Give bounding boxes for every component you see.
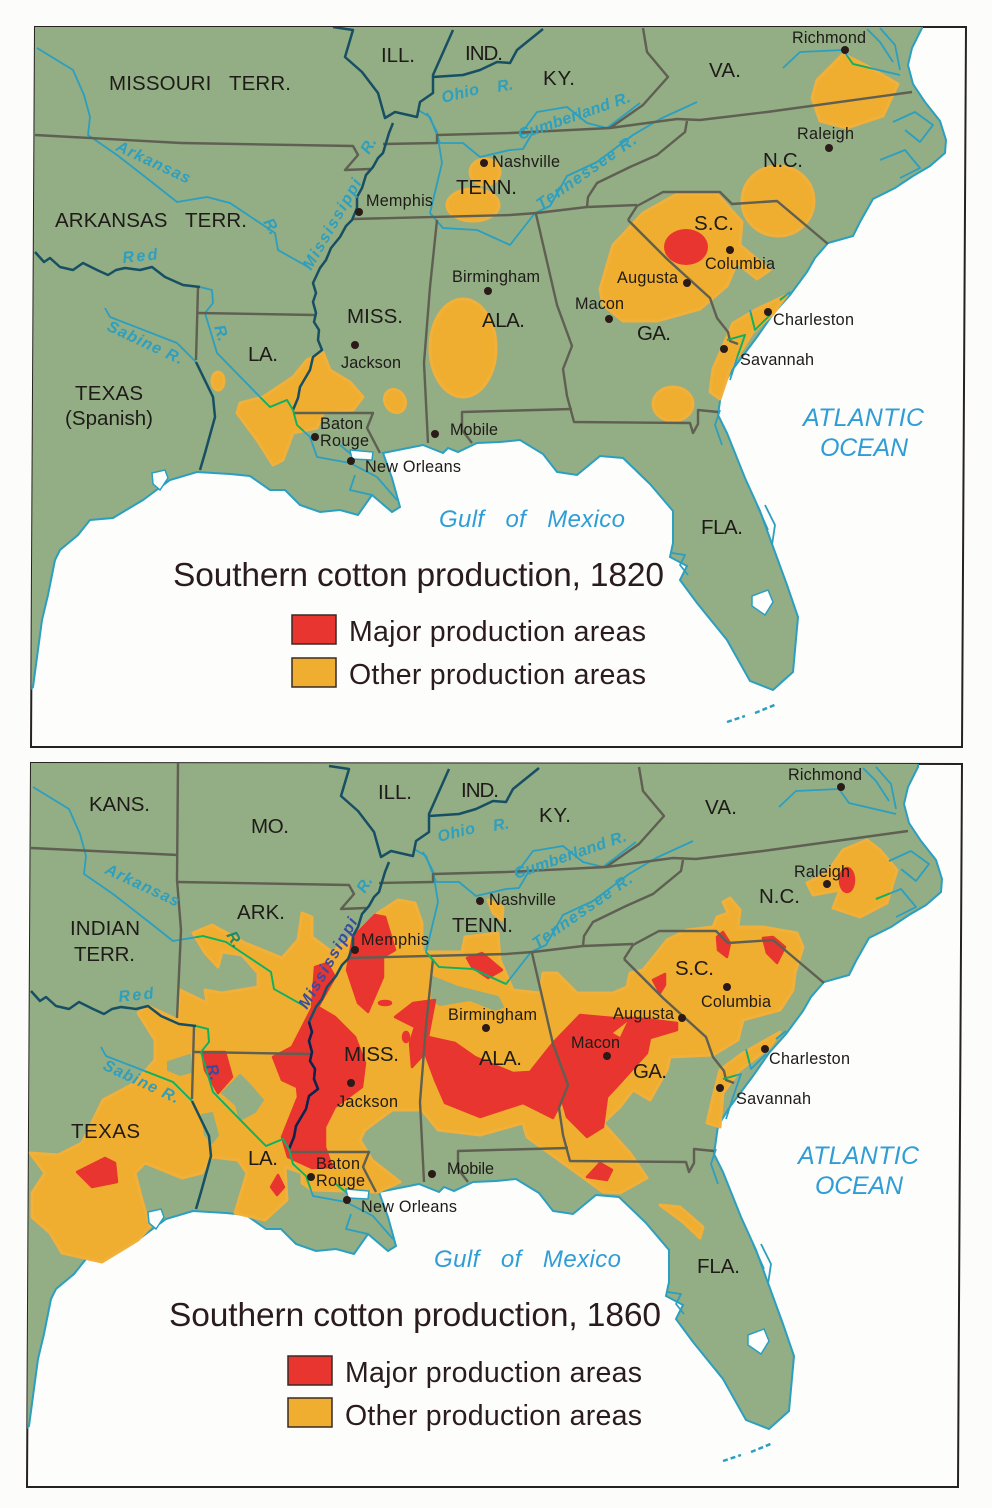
- state and territory labels 1860: ALA.: [479, 1047, 522, 1070]
- ocean labels 1820: OCEAN: [820, 434, 909, 462]
- state and territory labels 1860: TERR.: [74, 943, 135, 966]
- river labels 1820: Sabine R.: [104, 318, 186, 368]
- state and territory labels 1820: FLA.: [701, 516, 743, 539]
- state and territory labels 1820: ARKANSAS TERR.: [55, 209, 247, 232]
- ocean labels 1820: ATLANTIC: [801, 404, 925, 432]
- panel frame 1820: [31, 27, 966, 747]
- city labels 1820: Raleigh: [797, 125, 854, 143]
- city labels 1860: Charleston: [769, 1050, 850, 1068]
- city labels 1820: Macon: [575, 295, 624, 313]
- state and territory labels 1860: KANS.: [89, 793, 150, 816]
- legend 1820: Other production areas: [349, 659, 646, 691]
- city labels 1820: Savannah: [740, 351, 814, 369]
- state and territory labels 1860: MISS.: [344, 1043, 399, 1066]
- river labels 1820: R.: [260, 216, 282, 238]
- state and territory labels 1820: ILL.: [381, 44, 415, 67]
- city labels 1860: Mobile: [447, 1160, 494, 1178]
- city labels 1860: Macon: [571, 1034, 620, 1052]
- legend 1820: [292, 615, 646, 691]
- state and territory labels 1820: VA.: [709, 59, 741, 82]
- state and territory labels 1860: TENN.: [452, 914, 513, 937]
- river labels 1820: Mississippi: [300, 176, 366, 273]
- city labels 1820: New Orleans: [365, 458, 461, 476]
- city labels 1820: Birmingham: [452, 268, 540, 286]
- river labels 1820: Cumberland R.: [516, 89, 633, 144]
- state lines and rivers 1860: [31, 763, 929, 1461]
- legend 1860: Other production areas: [345, 1400, 642, 1432]
- other production areas 1820: [212, 54, 898, 465]
- state and territory labels 1860: N.C.: [759, 885, 800, 908]
- river labels 1860: Mississippi: [296, 915, 362, 1012]
- state and territory labels 1860: LA.: [248, 1147, 278, 1170]
- river labels 1860: Sabine R.: [100, 1057, 182, 1107]
- river labels 1860: Cumberland R.: [512, 828, 629, 883]
- small cotton gap north of Macon: [613, 1022, 627, 1037]
- river labels 1820: Tennessee R.: [534, 132, 640, 213]
- state and territory labels 1860: GA.: [633, 1060, 667, 1083]
- city labels 1860: Memphis: [361, 931, 429, 949]
- city labels 1860: Birmingham: [448, 1006, 537, 1024]
- river labels 1860: Red: [118, 985, 155, 1006]
- city labels 1820: Nashville: [492, 153, 560, 171]
- state and territory labels 1820: TEXAS: [75, 382, 143, 405]
- state and territory labels 1820: IND.: [465, 42, 503, 65]
- river labels 1860: Arkansas: [101, 861, 182, 910]
- ocean labels 1860: Gulf of Mexico: [434, 1246, 621, 1273]
- city labels 1820: Memphis: [366, 192, 433, 210]
- river labels 1860: R.: [223, 928, 245, 951]
- state and territory labels 1820: TENN.: [456, 176, 517, 199]
- city labels 1860: Baton: [316, 1155, 360, 1173]
- city labels 1860: New Orleans: [361, 1198, 457, 1216]
- state and territory labels 1820: LA.: [248, 343, 278, 366]
- river labels 1860: Tennessee R.: [530, 871, 636, 952]
- state and territory labels 1860: KY.: [539, 804, 571, 827]
- state and territory labels 1860: ILL.: [378, 781, 412, 804]
- panel: cotton production map 1820: [20, 20, 966, 747]
- river labels 1860: [100, 815, 636, 1107]
- river labels 1820: R.: [210, 323, 231, 343]
- river labels 1820: R.: [496, 76, 514, 96]
- river labels 1820: Red: [122, 246, 159, 267]
- ocean labels 1820: [439, 404, 925, 533]
- panel frame 1860: [27, 763, 962, 1487]
- river labels 1820: Arkansas: [112, 138, 193, 187]
- major production area 1820: [664, 229, 708, 265]
- state and territory labels 1860: FLA.: [697, 1255, 740, 1278]
- title 1860: Southern cotton production, 1860: [169, 1297, 661, 1334]
- city labels 1820: Rouge: [320, 432, 369, 450]
- city labels 1860: Jackson: [337, 1093, 398, 1111]
- city labels 1820: Charleston: [773, 311, 854, 329]
- state and territory labels 1860: VA.: [705, 796, 737, 819]
- river labels 1860: Ohio: [436, 820, 477, 846]
- land base 1820: [20, 20, 946, 700]
- city labels 1820: [320, 29, 866, 476]
- legend 1820: Major production areas: [349, 616, 646, 648]
- city labels 1860: Nashville: [489, 891, 556, 909]
- ocean labels 1860: OCEAN: [815, 1172, 904, 1200]
- city labels 1820: Augusta: [617, 269, 678, 287]
- state and territory labels 1860: ARK.: [237, 901, 285, 924]
- city labels 1820: Mobile: [450, 421, 498, 439]
- river labels 1860: R.: [202, 1062, 223, 1082]
- other production areas 1860: [30, 840, 897, 1262]
- state and territory labels 1820: (Spanish): [65, 407, 153, 430]
- city labels 1820: Jackson: [341, 354, 401, 372]
- legend 1860: [288, 1356, 642, 1432]
- city dots 1860: [307, 783, 845, 1204]
- state and territory labels 1860: TEXAS: [71, 1120, 140, 1143]
- city labels 1820: Columbia: [705, 255, 775, 273]
- river labels 1820: Ohio: [440, 81, 481, 107]
- state and territory labels 1860: MO.: [251, 815, 289, 838]
- city dots 1820: [311, 46, 849, 465]
- ocean labels 1860: ATLANTIC: [796, 1142, 920, 1170]
- city labels 1820: Richmond: [792, 29, 866, 47]
- city labels 1860: Raleigh: [794, 863, 850, 881]
- city labels 1860: [316, 766, 862, 1216]
- ocean labels 1820: Gulf of Mexico: [439, 506, 625, 533]
- state and territory labels 1820: S.C.: [694, 212, 734, 235]
- state and territory labels 1860: S.C.: [675, 957, 714, 980]
- title 1820: Southern cotton production, 1820: [173, 557, 664, 594]
- river labels 1820: [104, 76, 640, 368]
- land base 1860: [16, 759, 942, 1439]
- state and territory labels 1860: INDIAN: [70, 917, 140, 940]
- state and territory labels 1820: MISS.: [347, 305, 403, 328]
- city labels 1860: Richmond: [788, 766, 862, 784]
- ocean labels 1860: [434, 1142, 920, 1273]
- state and territory labels 1820: [55, 42, 803, 539]
- state and territory labels 1820: KY.: [543, 67, 575, 90]
- state lines and rivers 1820: [35, 27, 933, 722]
- state and territory labels 1820: N.C.: [763, 149, 803, 172]
- legend 1860: Major production areas: [345, 1357, 642, 1389]
- city labels 1860: Savannah: [736, 1090, 811, 1108]
- panel: cotton production map 1860: [16, 759, 962, 1487]
- state and territory labels 1820: ALA.: [482, 309, 525, 332]
- state and territory labels 1860: [70, 779, 800, 1278]
- river labels 1860: R.: [492, 815, 510, 835]
- river labels 1820: R.: [358, 135, 380, 157]
- state and territory labels 1820: MISSOURI TERR.: [109, 72, 291, 95]
- major production areas 1860: [77, 868, 854, 1195]
- state and territory labels 1860: IND.: [461, 779, 499, 802]
- city labels 1820: Baton: [320, 415, 363, 433]
- river labels 1860: R.: [354, 874, 376, 896]
- city labels 1860: Augusta: [613, 1005, 674, 1023]
- city labels 1860: Columbia: [701, 993, 771, 1011]
- state and territory labels 1820: GA.: [637, 322, 671, 345]
- unplanted gaps inside the production belt: [168, 977, 503, 1143]
- city labels 1860: Rouge: [316, 1172, 365, 1190]
